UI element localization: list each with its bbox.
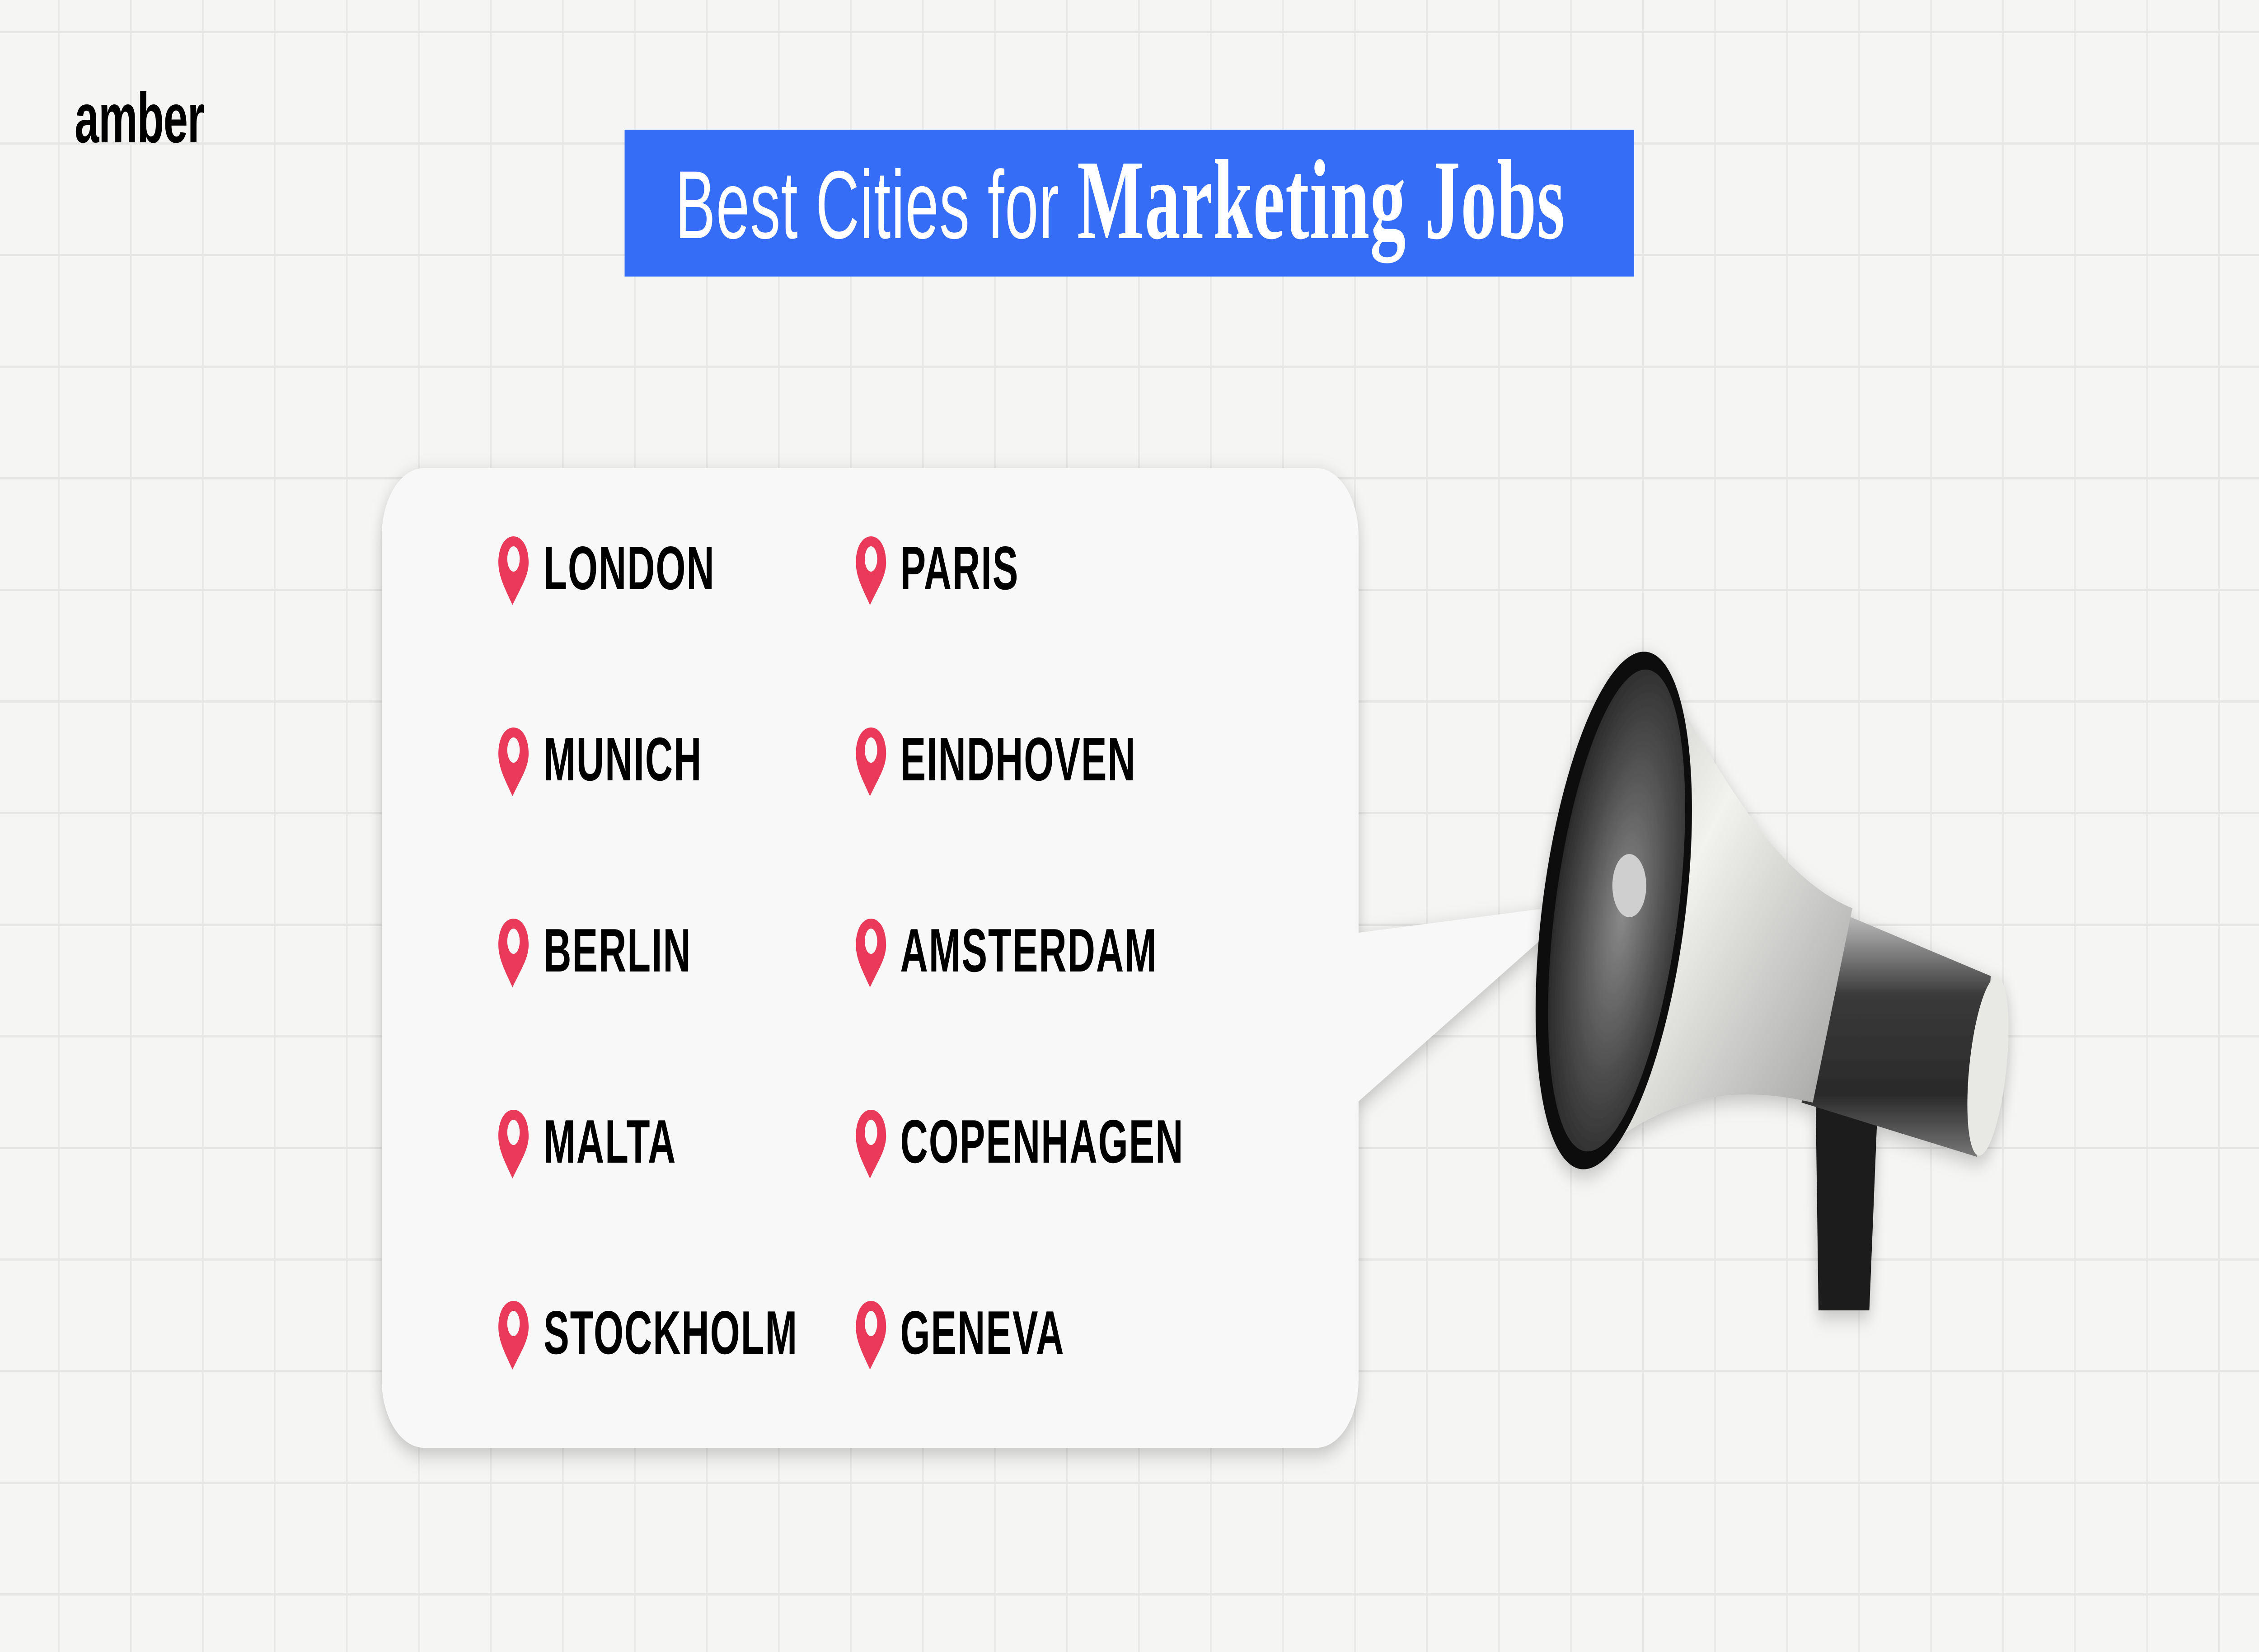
title banner: Best Cities for Marketing Jobs: [675, 137, 1565, 263]
city: Eindhoven: EINDHOVEN: [900, 725, 1136, 794]
city: Paris: PARIS: [900, 534, 1019, 603]
city: Geneva: GENEVA: [900, 1299, 1064, 1367]
icon: megaphone: [1508, 628, 2016, 1310]
city: Stockholm: STOCKHOLM: [544, 1299, 798, 1367]
city: Amsterdam: AMSTERDAM: [900, 916, 1158, 985]
speech bubble: [382, 468, 1581, 1448]
city list: [498, 534, 1184, 1370]
city: Berlin: BERLIN: [544, 916, 692, 985]
city: London: LONDON: [544, 534, 715, 603]
city: Munich: MUNICH: [544, 725, 702, 794]
logo: amber: amber: [75, 78, 204, 158]
city: Malta: MALTA: [544, 1108, 676, 1176]
city: Copenhagen: COPENHAGEN: [900, 1108, 1184, 1176]
